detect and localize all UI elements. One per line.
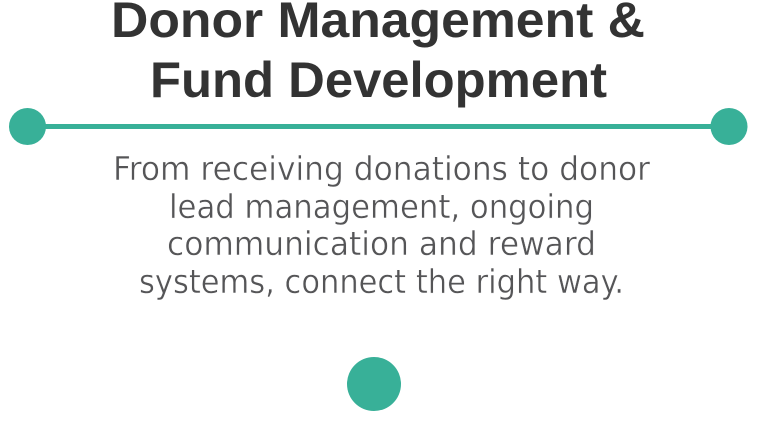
bottom circle marker <box>347 357 401 411</box>
description text: From receiving donations to donor <box>113 149 650 188</box>
description text <box>113 149 650 301</box>
title <box>111 0 645 108</box>
divider line with end dots <box>9 108 748 145</box>
description text: lead management, ongoing <box>169 187 594 226</box>
description text: systems, connect the right way. <box>139 262 624 301</box>
title: Fund Development <box>150 52 607 108</box>
description text: communication and reward <box>167 224 596 263</box>
